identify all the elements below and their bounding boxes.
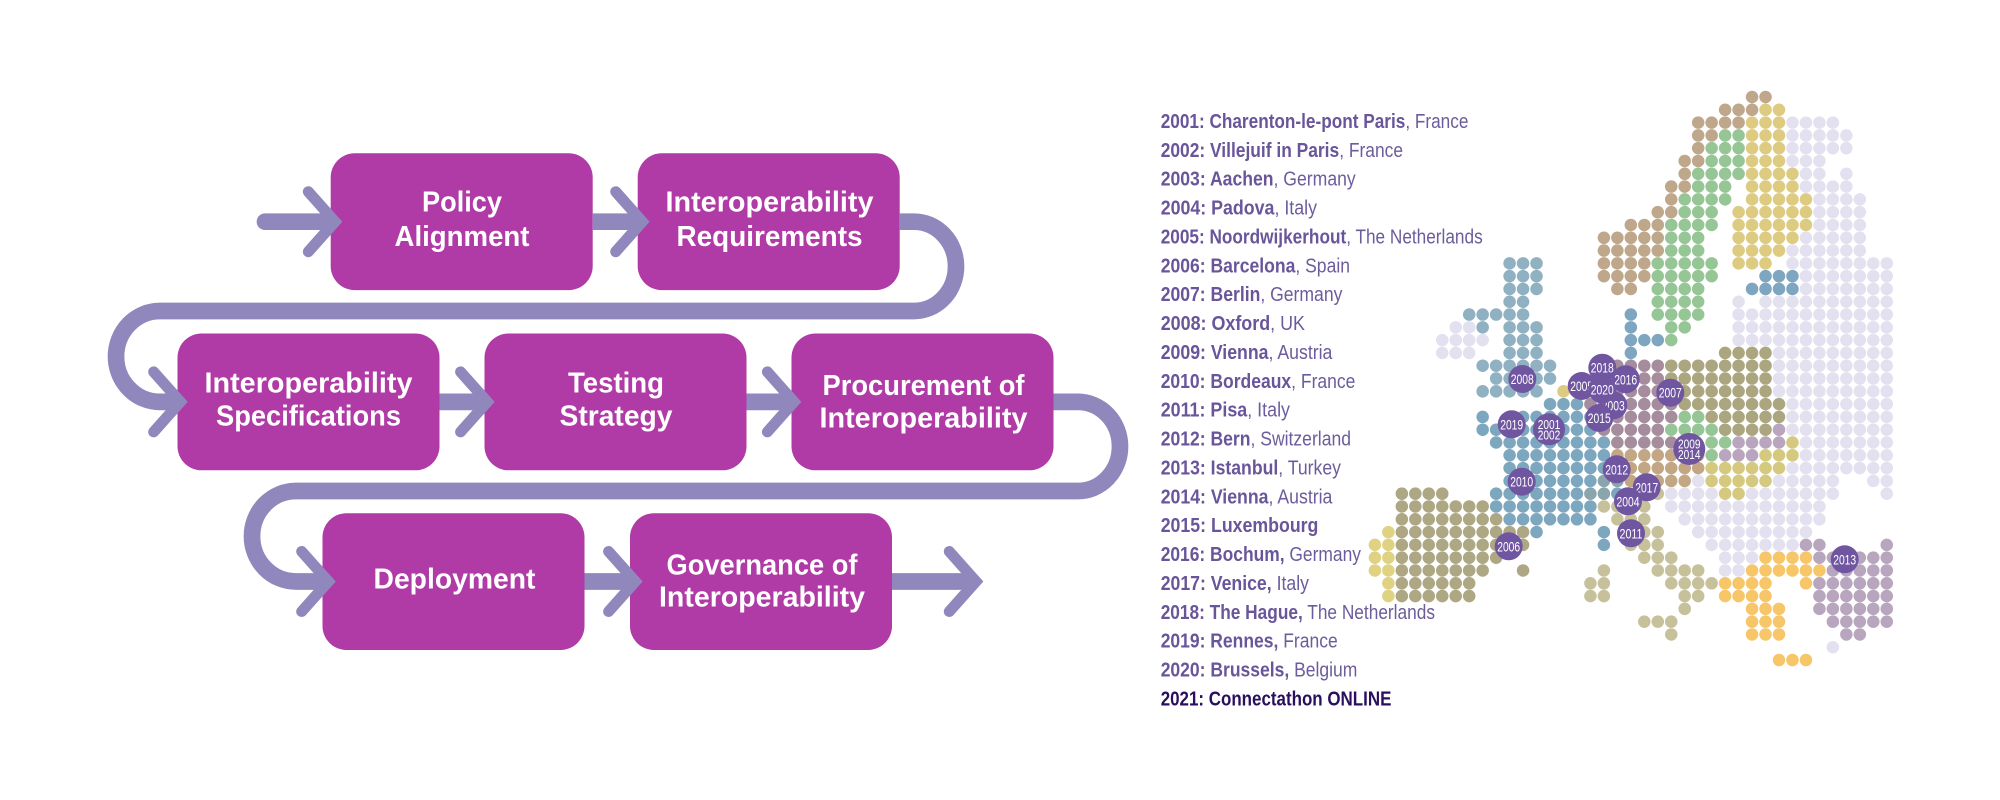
marker: 2006 Barcelona: 2006 <box>1497 538 1520 554</box>
marker: 2009 and 2014 Vienna: 2009 <box>1678 437 1701 452</box>
marker: 2017 Venice <box>1633 473 1661 501</box>
marker: 2015 Luxembourg <box>1585 404 1613 432</box>
dots: France <box>1483 404 1617 545</box>
marker: 2005 Noordwijkerhout <box>1568 372 1596 400</box>
list: connectathon years and locations: 2008: Oxford, UK <box>1161 313 1306 335</box>
list: connectathon years and locations: 2004: Padova, Italy <box>1161 198 1317 220</box>
marker: 2009 and 2014 Vienna: 2014 <box>1678 447 1701 462</box>
list: connectathon years and locations: 2011: Pisa, Italy <box>1161 400 1290 422</box>
dots: Iceland <box>1442 327 1483 353</box>
marker: 2016 Bochum <box>1612 365 1640 393</box>
box: Governance of Interoperability: Governance of <box>666 550 858 582</box>
box: Deployment: Deployment <box>374 564 536 596</box>
dots: Italy and Adriatic <box>1590 494 1712 634</box>
dots: Romania and Ukraine <box>1712 443 1793 494</box>
box: Interoperability Requirements <box>638 153 900 290</box>
marker: 2015 Luxembourg: 2015 <box>1588 410 1611 426</box>
box: Interoperability Specifications: Interoperability <box>204 368 412 400</box>
dots: Portugal <box>1375 532 1389 596</box>
marker: 2020 Brussels <box>1588 376 1616 404</box>
marker: 2007 Berlin: 2007 <box>1659 385 1682 401</box>
arrow: Specifications to Testing Strategy <box>440 372 487 432</box>
marker: 2003 Aachen: 2003 <box>1602 397 1625 413</box>
marker: 2001 and 2002 Paris <box>1533 413 1565 445</box>
list: connectathon years and locations: 2020: Brussels, Belgium <box>1161 660 1357 682</box>
box: Testing Strategy: Strategy <box>560 400 672 432</box>
marker: 2009 and 2014 Vienna <box>1673 433 1705 465</box>
marker: 2012 Bern: 2012 <box>1605 461 1628 477</box>
box: Interoperability Requirements: Interoperability <box>666 187 874 219</box>
marker: 2013 Istanbul: 2013 <box>1833 551 1856 567</box>
arrow: Requirements wrapping to Specifications <box>116 222 956 432</box>
dots: United Kingdom and Ireland <box>1469 263 1550 391</box>
marker: 2011 Pisa <box>1617 519 1645 547</box>
list: connectathon years and locations: 2001: Charenton-le-pont Paris, France <box>1161 111 1468 133</box>
marker: 2004 Padova: 2004 <box>1616 493 1640 509</box>
box: Procurement of Interoperability: Interoperability <box>820 402 1028 434</box>
box: Governance of Interoperability <box>630 513 892 650</box>
dots: Poland <box>1671 353 1779 430</box>
dots: Russia and eastern Europe <box>1671 123 1887 647</box>
marker: 2019 Rennes <box>1498 410 1526 438</box>
list: connectathon years and locations: 2003: Aachen, Germany <box>1161 169 1356 191</box>
arrow: Testing Strategy to Procurement <box>746 372 794 432</box>
marker: 2010 Bordeaux: 2010 <box>1510 474 1533 490</box>
dots: Turkey and Middle East <box>1806 545 1887 634</box>
marker: 2011 Pisa: 2011 <box>1620 525 1643 541</box>
marker: 2019 Rennes: 2019 <box>1500 416 1523 432</box>
box: Interoperability Requirements: Requirements <box>676 221 862 253</box>
dots: Spain <box>1402 494 1523 596</box>
box: Testing Strategy <box>484 334 746 470</box>
marker: 2016 Bochum: 2016 <box>1614 371 1637 387</box>
dots: Norway <box>1604 97 1766 289</box>
dots: Greece and Balkans <box>1725 558 1820 660</box>
marker: 2006 Barcelona <box>1495 532 1523 560</box>
marker: 2018 The Hague <box>1588 354 1616 382</box>
box: Governance of Interoperability: Interoperability <box>659 582 865 614</box>
marker: 2012 Bern <box>1603 455 1631 483</box>
box: Deployment <box>322 513 584 650</box>
list: connectathon years and locations: 2009: Vienna, Austria <box>1161 342 1333 364</box>
chart: dot-grid map of Europe <box>1375 97 1887 660</box>
box: Policy Alignment: Policy <box>422 187 502 219</box>
arrow: entry into Policy Alignment <box>265 192 335 252</box>
marker: 2010 Bordeaux <box>1508 468 1536 496</box>
box: Interoperability Specifications <box>178 334 440 470</box>
marker: 2008 Oxford <box>1508 365 1536 393</box>
box: Policy Alignment: Alignment <box>394 221 530 253</box>
list: connectathon years and locations: 2002: Villejuif in Paris, France <box>1161 140 1403 162</box>
arrow: exit from Governance <box>892 552 976 612</box>
list: connectathon years and locations <box>1161 111 1483 710</box>
marker: 2018 The Hague: 2018 <box>1591 360 1614 376</box>
dots: Finland <box>1563 110 1806 391</box>
marker: 2003 Aachen <box>1599 391 1627 419</box>
list: connectathon years and locations: 2021: Connectathon ONLINE <box>1161 688 1391 710</box>
marker: 2008 Oxford: 2008 <box>1511 371 1534 387</box>
list: connectathon years and locations: 2012: Bern, Switzerland <box>1161 429 1351 451</box>
box: Interoperability Specifications: Specifications <box>216 400 401 432</box>
box: Testing Strategy: Testing <box>568 368 664 400</box>
arrow: Policy Alignment to Interoperability Requirements <box>593 192 642 252</box>
marker: 2007 Berlin <box>1656 379 1684 407</box>
list: connectathon years and locations: 2017: Venice, Italy <box>1161 573 1309 595</box>
list: connectathon years and locations: 2005: Noordwijkerhout, The Netherlands <box>1161 226 1483 248</box>
list: connectathon years and locations: 2007: Berlin, Germany <box>1161 284 1342 306</box>
dots: Estonia, Latvia and Denmark <box>1631 276 1793 353</box>
dots: Slovakia and Hungary <box>1725 430 1779 455</box>
marker: 2013 Istanbul <box>1831 545 1859 573</box>
list: connectathon years and locations: 2014: Vienna, Austria <box>1161 486 1333 508</box>
marker: 2020 Brussels: 2020 <box>1591 382 1614 398</box>
list: connectathon years and locations: 2018: The Hague, The Netherlands <box>1161 602 1435 624</box>
box: Procurement of Interoperability <box>792 334 1054 470</box>
box: Policy Alignment <box>331 153 593 290</box>
list: connectathon years and locations: 2010: Bordeaux, France <box>1161 371 1355 393</box>
dots: Austria and Czechia <box>1617 455 1698 481</box>
dots: Germany and Benelux <box>1590 366 1671 443</box>
dots: Sweden <box>1658 135 1739 455</box>
markers: connectathon host cities <box>1495 354 1859 573</box>
list: connectathon years and locations: 2015: Luxembourg <box>1161 515 1318 537</box>
box: Procurement of Interoperability: Procurement of <box>822 370 1025 402</box>
panel: interoperability process flow <box>116 153 1120 650</box>
arrow: Deployment to Governance <box>584 552 635 612</box>
marker: 2017 Venice: 2017 <box>1635 479 1658 495</box>
arrow: Procurement wrapping to Deployment <box>252 402 1120 612</box>
list: connectathon years and locations: 2016: Bochum, Germany <box>1161 544 1361 566</box>
marker: 2004 Padova <box>1614 487 1642 515</box>
marker: 2001 and 2002 Paris: 2002 <box>1538 427 1560 442</box>
list: connectathon years and locations: 2006: Barcelona, Spain <box>1161 255 1350 277</box>
marker: 2005 Noordwijkerhout: 2005 <box>1570 378 1593 394</box>
list: connectathon years and locations: 2019: Rennes, France <box>1161 631 1338 653</box>
list: connectathon years and locations: 2013: Istanbul, Turkey <box>1161 457 1341 479</box>
marker: 2001 and 2002 Paris: 2001 <box>1538 417 1560 432</box>
dots: Switzerland <box>1590 481 1617 494</box>
